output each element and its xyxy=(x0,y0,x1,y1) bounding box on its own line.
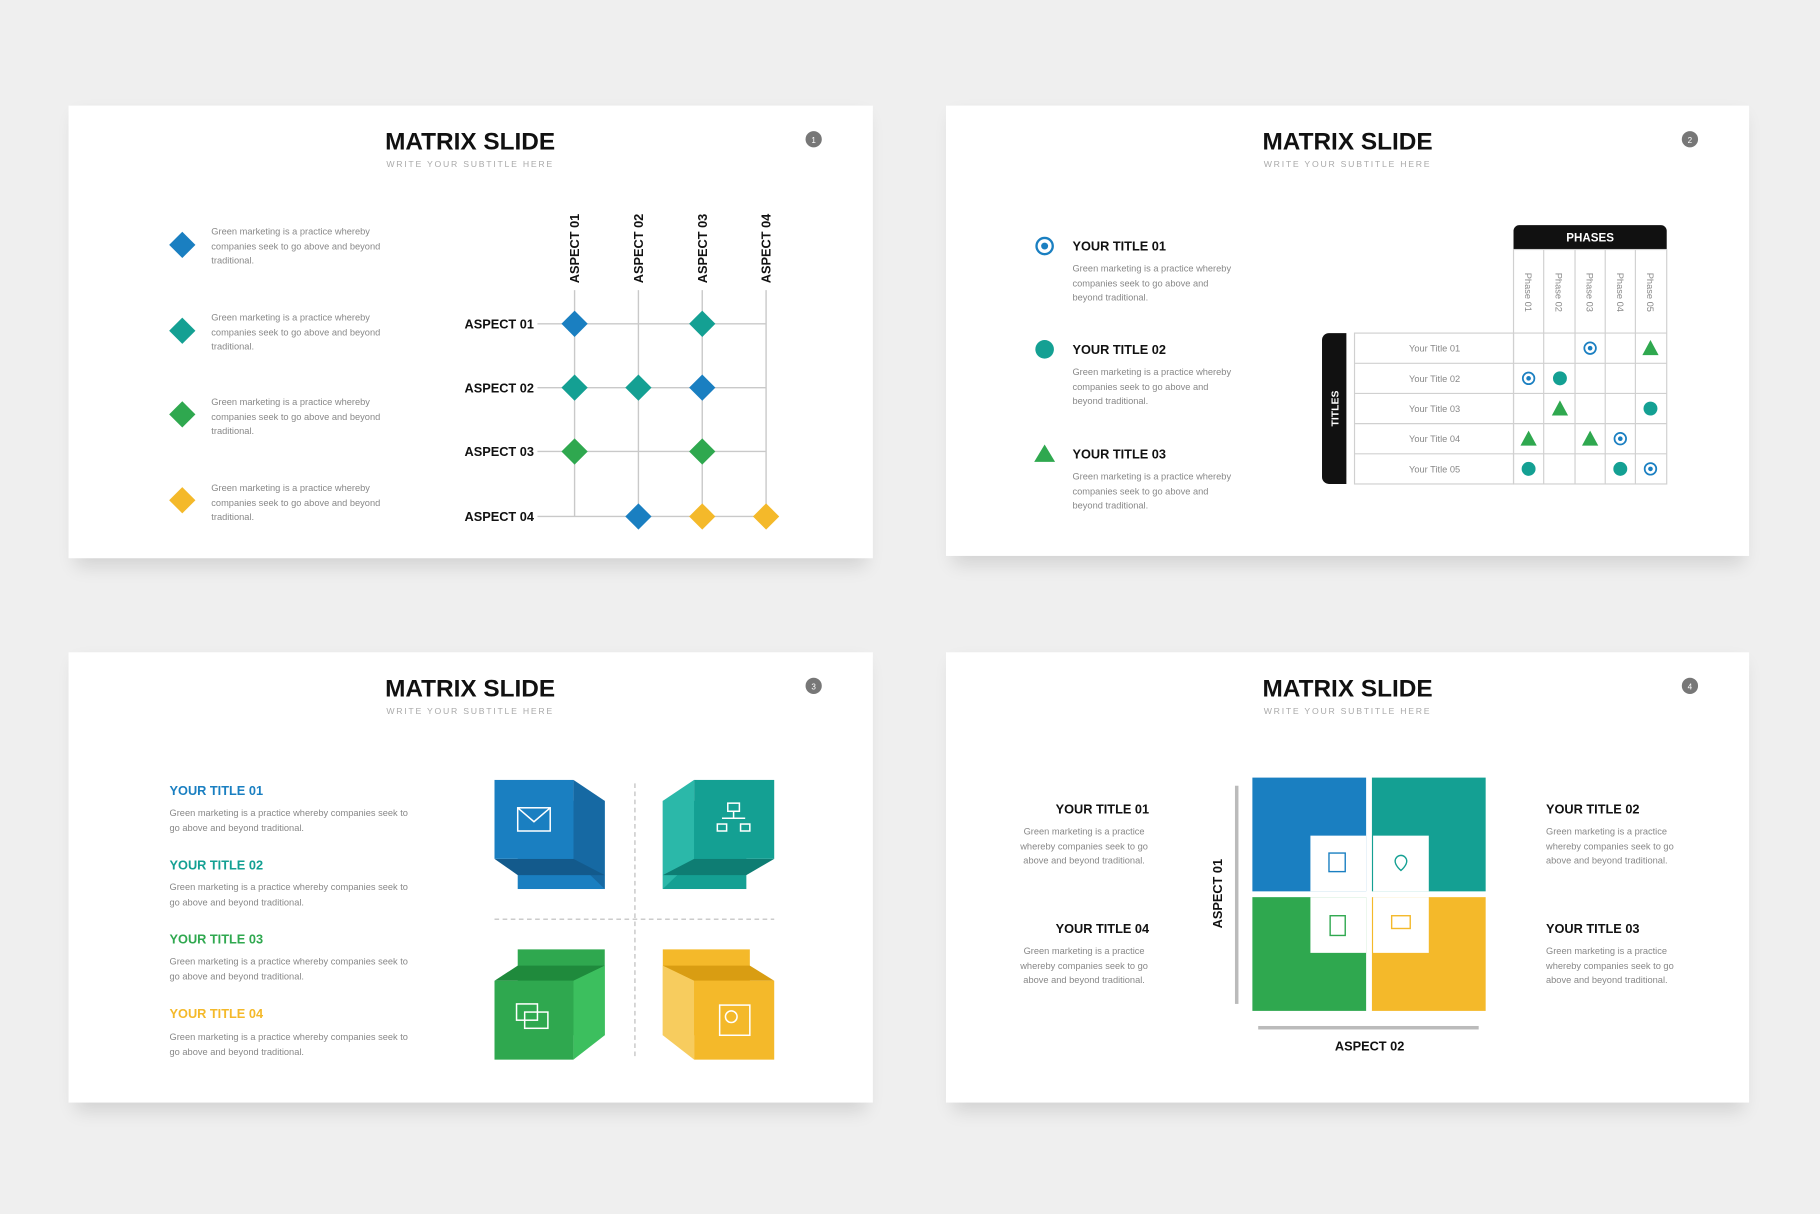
badge 2: 2 xyxy=(1688,136,1693,145)
list 3: YOUR TITLE 02 xyxy=(170,857,263,872)
title 1: MATRIX SLIDE xyxy=(385,129,555,156)
phases table: Your Title 01 xyxy=(1409,344,1460,354)
badge 1: 1 xyxy=(811,136,816,145)
legend 1: traditional. xyxy=(211,341,254,351)
left texts 4: Green marketing is a practice xyxy=(1024,946,1145,956)
badge 2 xyxy=(1682,131,1698,147)
title 3 xyxy=(385,675,555,716)
right texts 4: YOUR TITLE 02 xyxy=(1546,802,1640,817)
axes 4 xyxy=(1210,786,1479,1053)
phases table: Your Title 05 xyxy=(1409,464,1460,474)
title 4: WRITE YOUR SUBTITLE HERE xyxy=(1264,706,1431,716)
right texts 4: above and beyond traditional. xyxy=(1546,975,1668,985)
slide 4 panel xyxy=(946,652,1749,1111)
left texts 4: YOUR TITLE 04 xyxy=(1056,921,1150,936)
list 3: go above and beyond traditional. xyxy=(170,897,304,907)
legend 2: Green marketing is a practice whereby xyxy=(1072,264,1231,274)
title 4 xyxy=(1263,675,1433,716)
legend 1: traditional. xyxy=(211,255,254,265)
legend 1: traditional. xyxy=(211,426,254,436)
legend 2: YOUR TITLE 03 xyxy=(1072,446,1166,461)
list 3: Green marketing is a practice whereby companies seek to xyxy=(170,1032,408,1042)
axes 4: ASPECT 01 xyxy=(1210,859,1225,928)
badge 3: 3 xyxy=(811,682,816,691)
legend 1: companies seek to go above and beyond xyxy=(211,327,380,337)
slide 3 panel xyxy=(69,652,873,1111)
legend 1: Green marketing is a practice whereby xyxy=(211,312,370,322)
right texts 4: whereby companies seek to go xyxy=(1545,842,1674,852)
phases table: Phase 01 xyxy=(1523,273,1533,312)
matrix grid 1 xyxy=(465,213,779,530)
legend 2: YOUR TITLE 01 xyxy=(1072,239,1166,254)
quadrant matrix 4 xyxy=(1252,778,1486,1011)
phases table: Your Title 03 xyxy=(1409,404,1460,414)
badge 4 xyxy=(1682,678,1698,694)
matrix grid 1: ASPECT 01 xyxy=(567,214,582,283)
list 3: go above and beyond traditional. xyxy=(170,823,304,833)
matrix grid 1: ASPECT 01 xyxy=(465,316,534,331)
legend 2: beyond traditional. xyxy=(1072,396,1148,406)
title 1 xyxy=(385,129,555,169)
legend 1: Green marketing is a practice whereby xyxy=(211,226,370,236)
legend 2: beyond traditional. xyxy=(1072,500,1148,510)
phases table: PHASES xyxy=(1566,231,1614,244)
cube teal xyxy=(663,780,774,889)
matrix grid 1: ASPECT 03 xyxy=(465,444,534,459)
right texts 4: YOUR TITLE 03 xyxy=(1546,921,1640,936)
left texts 4: above and beyond traditional. xyxy=(1023,855,1145,865)
cube blue xyxy=(495,780,605,889)
left texts 4: Green marketing is a practice xyxy=(1024,826,1145,836)
matrix grid 1: ASPECT 04 xyxy=(465,509,535,524)
legend 1: companies seek to go above and beyond xyxy=(211,498,380,508)
list 3: YOUR TITLE 03 xyxy=(170,932,263,947)
phases table: Phase 04 xyxy=(1615,273,1625,312)
slide 1 panel xyxy=(69,106,873,566)
phases table: Your Title 04 xyxy=(1409,434,1460,444)
title 2: WRITE YOUR SUBTITLE HERE xyxy=(1264,159,1431,169)
right texts 4: above and beyond traditional. xyxy=(1546,855,1668,865)
title 1: WRITE YOUR SUBTITLE HERE xyxy=(386,159,554,169)
legend 2: companies seek to go above and xyxy=(1072,382,1208,392)
title 2: MATRIX SLIDE xyxy=(1263,129,1433,156)
title 3: WRITE YOUR SUBTITLE HERE xyxy=(386,706,554,716)
legend 1: Green marketing is a practice whereby xyxy=(211,483,370,493)
legend 2 xyxy=(1034,238,1231,510)
left texts 4: above and beyond traditional. xyxy=(1023,975,1145,985)
axes 4: ASPECT 02 xyxy=(1335,1038,1404,1053)
legend 2: companies seek to go above and xyxy=(1072,486,1208,496)
badge 4: 4 xyxy=(1688,682,1693,691)
phases table: TITLES xyxy=(1330,391,1341,427)
list 3: go above and beyond traditional. xyxy=(170,972,304,982)
left texts 4: YOUR TITLE 01 xyxy=(1056,802,1149,817)
phases table: Phase 03 xyxy=(1585,273,1595,312)
legend 1: companies seek to go above and beyond xyxy=(211,412,380,422)
phases table: Your Title 02 xyxy=(1409,374,1460,384)
matrix grid 1: ASPECT 02 xyxy=(465,380,534,395)
legend 1: traditional. xyxy=(211,512,254,522)
list 3: go above and beyond traditional. xyxy=(170,1047,304,1057)
title 2 xyxy=(1263,129,1433,169)
legend 2: companies seek to go above and xyxy=(1072,279,1208,289)
left texts 4: whereby companies seek to go xyxy=(1019,961,1148,971)
list 3: YOUR TITLE 04 xyxy=(170,1006,264,1021)
legend 2: YOUR TITLE 02 xyxy=(1072,342,1166,357)
phases table xyxy=(1322,225,1667,484)
list 3: YOUR TITLE 01 xyxy=(170,783,263,798)
list 3: Green marketing is a practice whereby companies seek to xyxy=(170,956,408,966)
title 4: MATRIX SLIDE xyxy=(1263,675,1433,702)
legend 1 xyxy=(169,226,380,522)
list 3: Green marketing is a practice whereby companies seek to xyxy=(170,882,408,892)
matrix grid 1: ASPECT 03 xyxy=(695,214,710,283)
list 3: Green marketing is a practice whereby companies seek to xyxy=(170,808,408,818)
right texts 4: Green marketing is a practice xyxy=(1546,826,1667,836)
phases table: Phase 05 xyxy=(1645,273,1655,312)
slide 2 panel xyxy=(946,106,1749,564)
left texts 4 xyxy=(1019,802,1150,985)
badge 3 xyxy=(806,678,822,694)
cube green xyxy=(495,949,605,1060)
legend 2: beyond traditional. xyxy=(1072,293,1148,303)
right texts 4: whereby companies seek to go xyxy=(1545,961,1674,971)
left texts 4: whereby companies seek to go xyxy=(1019,842,1148,852)
legend 1: companies seek to go above and beyond xyxy=(211,242,380,252)
badge 1 xyxy=(806,131,822,147)
legend 1: Green marketing is a practice whereby xyxy=(211,397,370,407)
phases table: Phase 02 xyxy=(1553,273,1563,312)
legend 2: Green marketing is a practice whereby xyxy=(1072,471,1231,481)
cube yellow xyxy=(663,949,774,1060)
dashed dividers xyxy=(495,783,774,1060)
legend 2: Green marketing is a practice whereby xyxy=(1072,367,1231,377)
list 3 xyxy=(170,783,408,1057)
matrix grid 1: ASPECT 04 xyxy=(759,213,774,283)
right texts 4 xyxy=(1545,802,1674,985)
right texts 4: Green marketing is a practice xyxy=(1546,946,1667,956)
title 3: MATRIX SLIDE xyxy=(385,675,555,702)
matrix grid 1: ASPECT 02 xyxy=(631,214,646,283)
